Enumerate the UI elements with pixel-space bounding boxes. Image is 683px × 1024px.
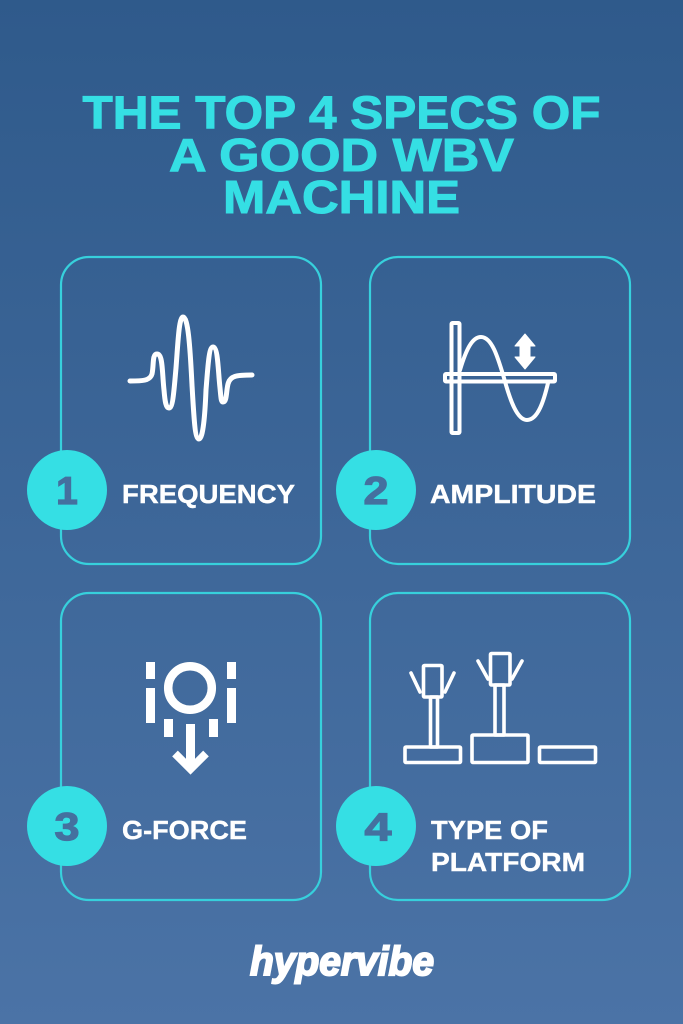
- title: [82, 86, 600, 223]
- panel: amplitude: [336, 257, 630, 564]
- panel: g-force: [27, 593, 321, 900]
- label: type of platform: TYPE OF: [431, 815, 548, 845]
- icon: g-force ring and arrow: [146, 662, 236, 769]
- card outline: frequency: [61, 257, 321, 564]
- title: THE TOP 4 SPECS OF: [82, 86, 600, 138]
- card outline: amplitude: [370, 257, 630, 564]
- title: A GOOD WBV: [169, 129, 514, 181]
- number badge 2: [336, 450, 416, 530]
- title: MACHINE: [223, 171, 460, 223]
- label: g-force: G-FORCE: [122, 815, 247, 845]
- label: type of platform: [431, 815, 585, 877]
- number badge 1: 1: [56, 470, 78, 513]
- icon: platforms: [405, 654, 596, 762]
- number badge 3: 3: [54, 806, 80, 849]
- label: frequency: FREQUENCY: [122, 479, 295, 509]
- icon: amplitude wave: [445, 323, 555, 433]
- label: type of platform: PLATFORM: [431, 847, 585, 877]
- panel: frequency: [27, 257, 321, 564]
- icon: waveform: [130, 317, 252, 439]
- card outline: type of platform: [370, 593, 630, 900]
- number badge 4: 4: [364, 806, 392, 850]
- number badge 1: [27, 450, 107, 530]
- label: amplitude: AMPLITUDE: [430, 479, 596, 509]
- panel: type of platform: [336, 593, 630, 900]
- card outline: g-force: [61, 593, 321, 900]
- number badge 3: [27, 786, 107, 866]
- logo: hypervibe: hypervibe: [250, 938, 434, 984]
- number badge 2: 2: [364, 470, 388, 513]
- number badge 4: [336, 786, 416, 866]
